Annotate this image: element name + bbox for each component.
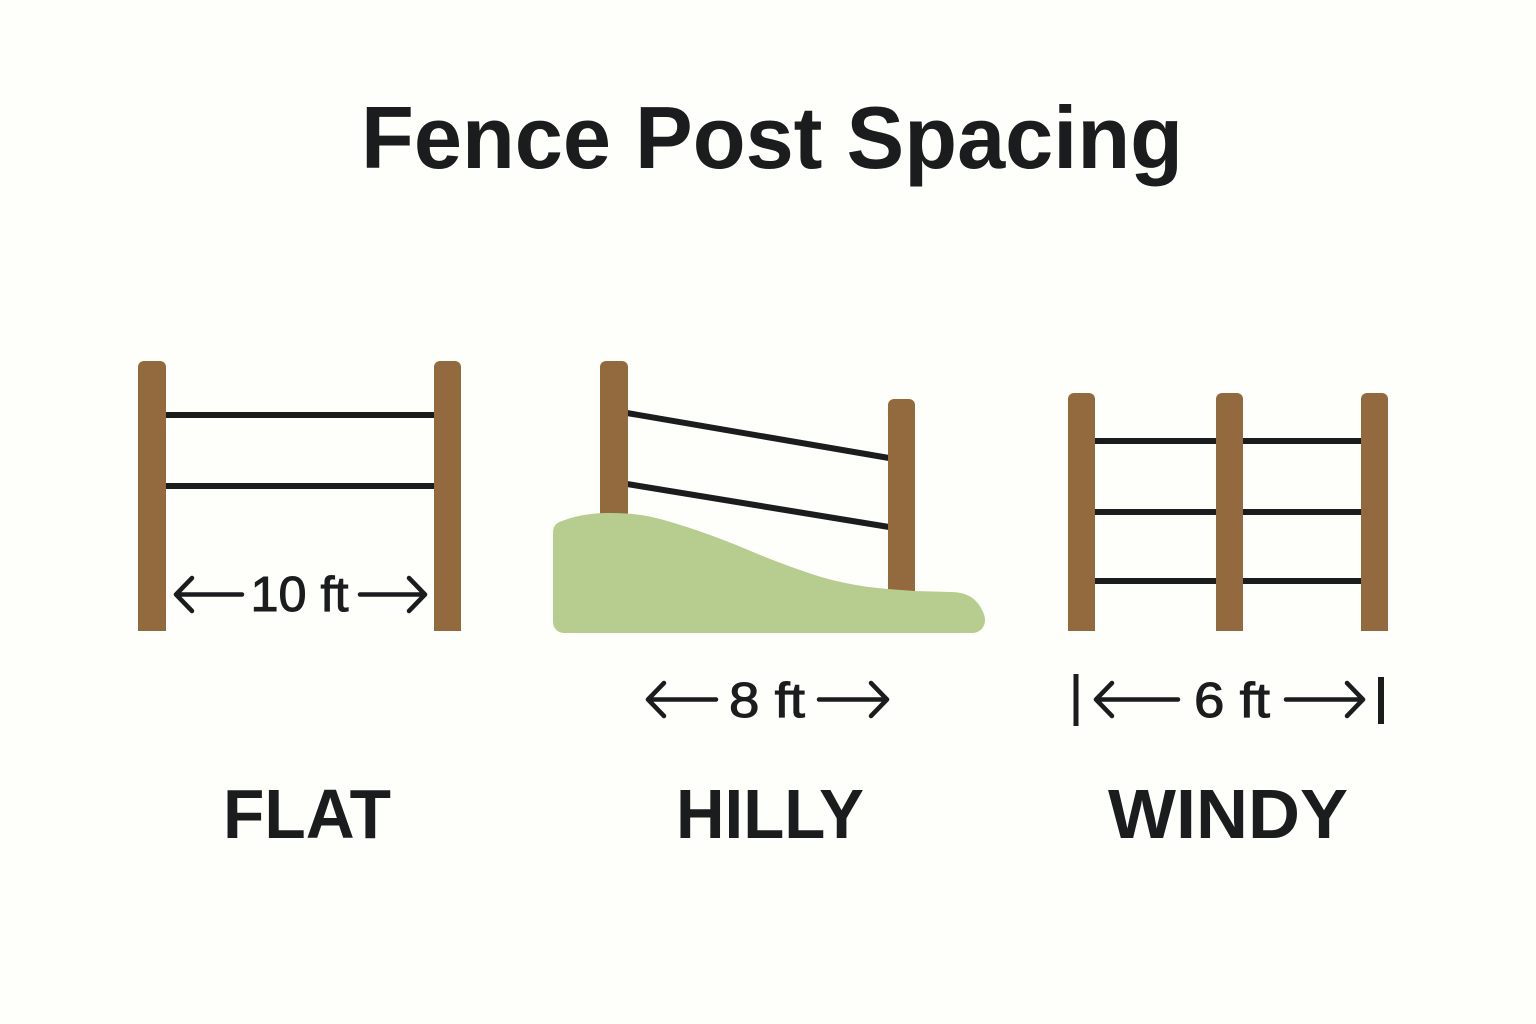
rails: hilly xyxy=(627,413,889,527)
measurement: 6 ft: 6 ft xyxy=(1194,674,1270,728)
post: windy middle xyxy=(1216,393,1243,631)
hill xyxy=(553,513,985,633)
panel: hilly fence xyxy=(553,361,985,853)
post: windy left xyxy=(1068,393,1095,631)
arrow: flat left xyxy=(176,578,242,611)
rails: windy xyxy=(1094,441,1362,581)
post: flat left xyxy=(138,361,166,631)
rails: flat xyxy=(165,415,435,486)
label: hilly: HILLY xyxy=(676,775,864,853)
title: Fence Post Spacing xyxy=(361,88,1183,187)
arrow: windy left xyxy=(1074,674,1178,726)
arrow: hilly right xyxy=(819,683,887,716)
post: flat right xyxy=(434,361,461,631)
label: windy: WINDY xyxy=(1108,775,1348,853)
post: windy right xyxy=(1361,393,1388,631)
panel: windy fence xyxy=(1068,393,1388,853)
panel: flat fence xyxy=(138,361,461,853)
measurement: 10 ft: 10 ft xyxy=(250,568,349,622)
post: hilly right xyxy=(888,399,915,600)
post: hilly left xyxy=(600,361,628,530)
label: flat: FLAT xyxy=(223,775,391,853)
arrow: windy right xyxy=(1286,677,1384,724)
arrow: flat right xyxy=(360,578,425,611)
arrow: hilly left xyxy=(648,683,716,716)
measurement: 8 ft: 8 ft xyxy=(729,674,805,728)
